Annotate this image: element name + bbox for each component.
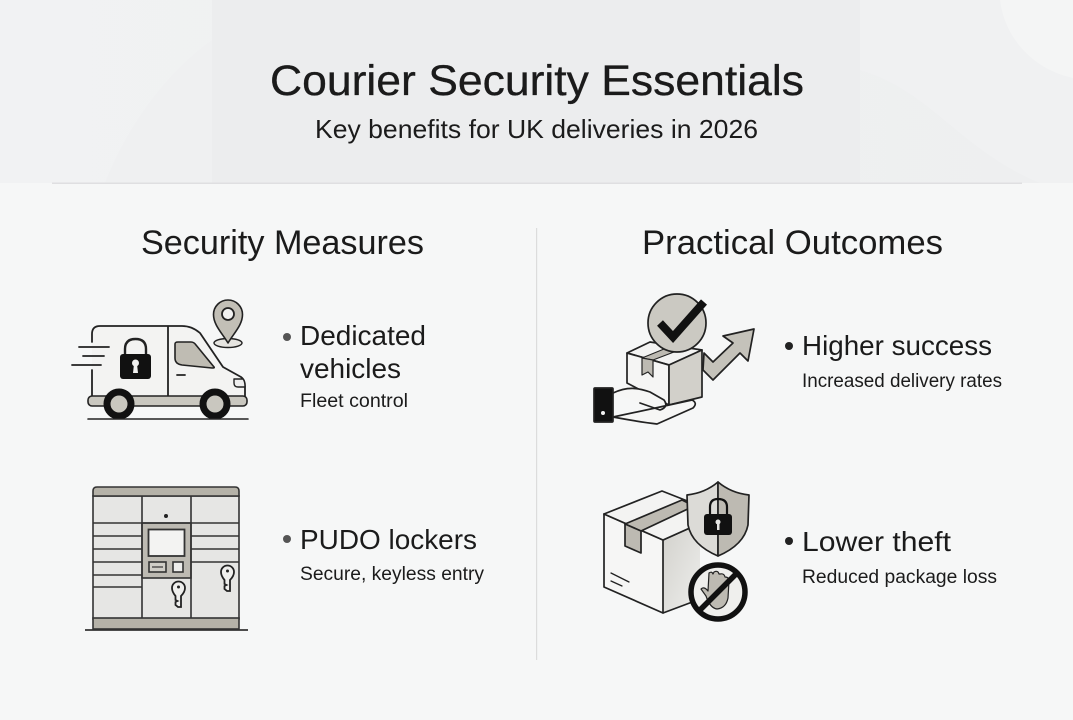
bullet: PUDO lockers: PUDO lockers [300, 524, 477, 555]
icon: delivery van with lock and location pin [72, 300, 248, 419]
heading: security measures: Security Measures [141, 224, 424, 262]
icon: parcel lockers [85, 487, 248, 630]
bullet: dedicated vehicles [283, 320, 426, 412]
heading: practical outcomes: Practical Outcomes [642, 224, 943, 262]
bullet: PUDO lockers: Secure, keyless entry [300, 564, 484, 585]
bullet: lower theft: Lower theft [802, 526, 951, 557]
bullet: dedicated vehicles: vehicles [300, 353, 401, 384]
title: Courier Security Essentials [270, 57, 804, 105]
bullet: higher success [785, 330, 1002, 392]
bullet: dedicated vehicles: Dedicated [300, 320, 426, 351]
bullet: higher success: Higher success [802, 330, 992, 361]
icon: box with shield and no-touch sign [604, 482, 749, 619]
subtitle: Key benefits for UK deliveries in 2026 [315, 114, 758, 144]
bullet: higher success: Increased delivery rates [802, 371, 1002, 392]
divider between panels [536, 228, 537, 660]
icon: hand holding box with check and rising arrow [594, 294, 754, 424]
header band [0, 0, 1073, 184]
panel: security measures [72, 224, 484, 630]
bullet: lower theft: Reduced package loss [802, 567, 997, 588]
bullet: PUDO lockers [283, 524, 484, 585]
panel: practical outcomes [594, 224, 1002, 619]
bullet: lower theft [785, 526, 997, 588]
bullet: dedicated vehicles: Fleet control [300, 391, 408, 412]
